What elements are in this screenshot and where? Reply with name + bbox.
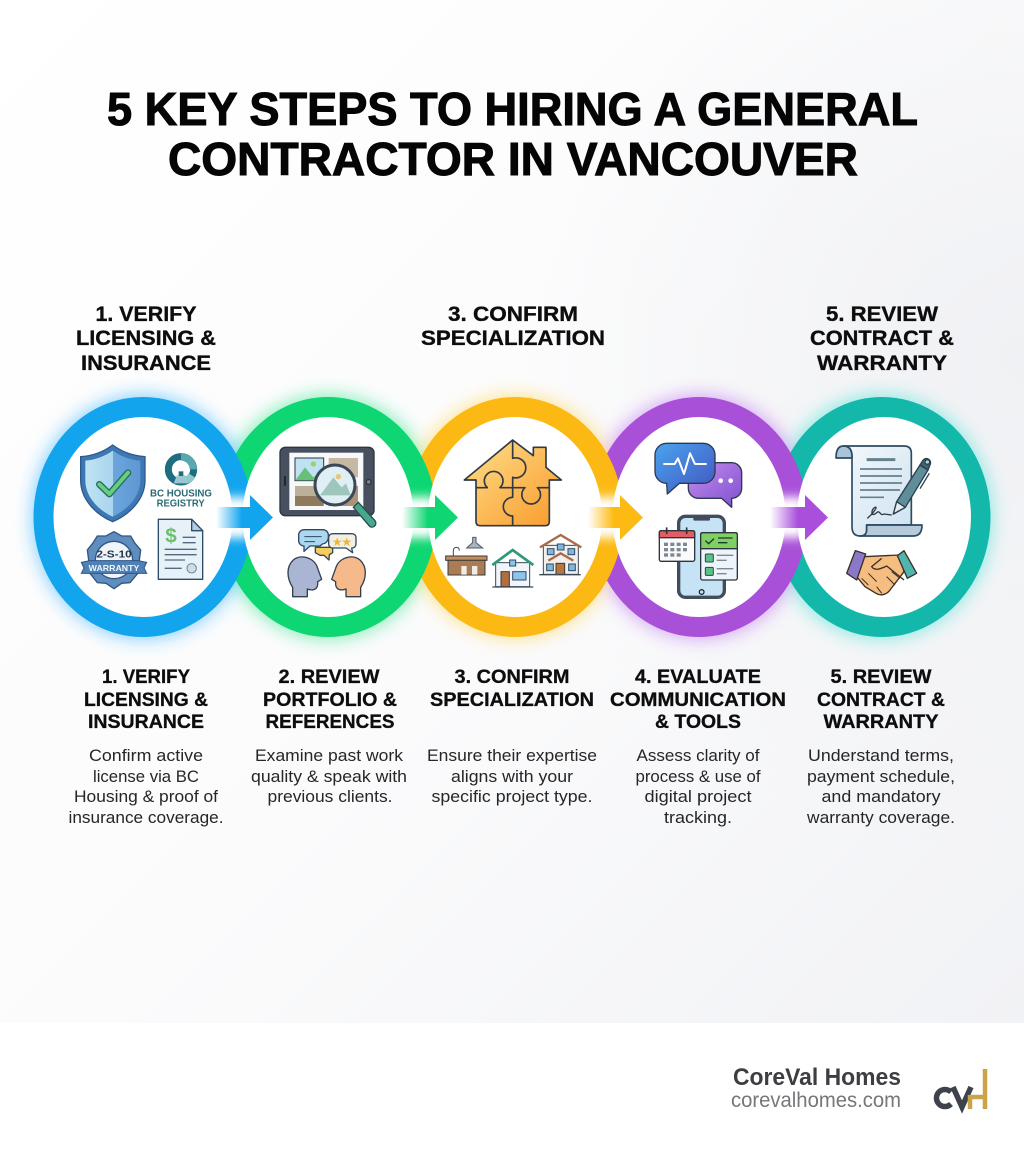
upper heading: step 5 <box>810 303 954 375</box>
description: step 2: previous clients. <box>268 787 392 806</box>
arrow: step 3 to 4 <box>588 495 643 540</box>
icon: BC Housing registry: BC HOUSING <box>150 489 212 500</box>
heading: step 1: INSURANCE <box>88 711 204 733</box>
description: step 5: payment schedule, <box>807 767 955 786</box>
description: step 1: Confirm active <box>89 746 203 765</box>
icons: step 5 contract and warranty <box>836 446 931 595</box>
upper heading: step 3: SPECIALIZATION <box>421 327 605 350</box>
icon: two-storey house <box>539 535 581 575</box>
icon: 2-5-10 warranty badge <box>81 532 147 589</box>
step 3 text <box>427 666 597 806</box>
icon: chat bubbles <box>655 443 742 507</box>
heading: step 1: 1. VERIFY <box>102 666 190 688</box>
icon: checklist card <box>701 533 737 580</box>
description: step 1 <box>68 746 224 827</box>
icon: insurance document <box>158 519 203 579</box>
icons: step 2 portfolio and references <box>280 447 376 597</box>
heading: step 3: 3. CONFIRM <box>454 666 570 688</box>
heading: step 1: LICENSING & <box>84 689 208 711</box>
heading: step 2: REFERENCES <box>266 711 394 733</box>
description: step 3: specific project type. <box>432 787 592 806</box>
icon: contract scroll <box>836 446 922 536</box>
heading: step 4: & TOOLS <box>655 711 741 733</box>
arrow: step 4 to 5 <box>770 495 828 540</box>
upper heading: step 5: 5. REVIEW <box>826 303 938 326</box>
upper heading: step 1: 1. VERIFY <box>96 303 196 326</box>
heading: step 4 <box>610 666 786 733</box>
heading: step 5: WARRANTY <box>824 711 938 733</box>
heading: step 2: 2. REVIEW <box>278 666 380 688</box>
icon: puzzle house <box>464 440 561 526</box>
footer brand <box>731 1064 901 1112</box>
icons: step 4 communication and tools <box>655 443 742 597</box>
ring chain <box>34 397 990 637</box>
description: step 5 <box>806 746 955 827</box>
icon: BC Housing registry <box>150 453 212 510</box>
step 1 text <box>68 666 224 827</box>
description: step 3: Ensure their expertise <box>427 746 597 765</box>
arrow: step 1 to 2 <box>216 495 273 540</box>
description: step 5: Understand terms, <box>808 746 954 765</box>
heading: step 4: 4. EVALUATE <box>635 666 761 688</box>
ring glows <box>44 407 980 627</box>
footer brand: CoreVal Homes <box>733 1064 901 1091</box>
junction halos <box>218 497 804 538</box>
description: step 2: quality & speak with <box>251 767 407 786</box>
heading: step 5: 5. REVIEW <box>830 666 932 688</box>
upper heading: step 3 <box>421 303 605 350</box>
icon: kitchen <box>446 537 487 575</box>
description: step 4: digital project <box>644 787 752 806</box>
heading: step 5: CONTRACT & <box>817 689 945 711</box>
ring interiors <box>54 417 971 617</box>
icon: pen <box>893 459 931 514</box>
title <box>107 83 918 185</box>
icon: insurance document: $ <box>165 525 177 548</box>
icon: shield with check <box>81 445 145 522</box>
heading: step 1 <box>84 666 208 733</box>
heading: step 2: PORTFOLIO & <box>263 689 397 711</box>
upper heading: step 5: CONTRACT & <box>810 327 954 350</box>
logo: CVH <box>936 1069 985 1109</box>
description: step 5: and mandatory <box>822 787 941 806</box>
title: CONTRACTOR IN VANCOUVER <box>168 133 858 185</box>
arrow: step 2 to 3 <box>402 495 458 540</box>
step 2 text <box>251 666 407 806</box>
heading: step 3: SPECIALIZATION <box>430 689 594 711</box>
description: step 3: aligns with your <box>451 767 573 786</box>
upper heading: step 1 <box>76 303 216 375</box>
description: step 1: insurance coverage. <box>68 808 224 827</box>
heading: step 4: COMMUNICATION <box>610 689 786 711</box>
upper heading: step 1: INSURANCE <box>81 352 211 375</box>
description: step 1: Housing & proof of <box>74 787 218 806</box>
description: step 4: process & use of <box>636 767 761 786</box>
icon: 2-5-10 warranty badge: WARRANTY <box>89 563 140 573</box>
description: step 2: Examine past work <box>255 746 404 765</box>
heading: step 3 <box>430 666 594 711</box>
icon: handshake <box>847 551 917 595</box>
icon: smartphone <box>679 516 724 597</box>
icon: two people talking <box>288 557 365 597</box>
icon: 2-5-10 warranty badge: 2-S-10 <box>96 550 132 561</box>
ring strokes <box>34 397 990 637</box>
upper heading: step 3: 3. CONFIRM <box>448 303 578 326</box>
footer brand: corevalhomes.com <box>731 1089 901 1112</box>
description: step 1: license via BC <box>93 767 199 786</box>
upper heading: step 1: LICENSING & <box>76 327 216 350</box>
icon: review speech bubbles <box>299 530 356 560</box>
description: step 4: tracking. <box>664 808 732 827</box>
description: step 2 <box>251 746 407 806</box>
description: step 4: Assess clarity of <box>636 746 760 765</box>
icons: step 1 licensing and insurance <box>81 445 212 589</box>
icon: review speech bubbles: ★★ <box>332 536 352 548</box>
icon: tablet with magnifier <box>280 447 376 527</box>
icon: calendar <box>659 527 695 561</box>
icon: small house <box>492 550 533 587</box>
step 4 text <box>610 666 786 827</box>
icon: BC Housing registry: REGISTRY <box>157 499 205 510</box>
description: step 5: warranty coverage. <box>806 808 955 827</box>
step 5 text <box>806 666 955 827</box>
upper heading: step 5: WARRANTY <box>817 352 947 375</box>
heading: step 2 <box>263 666 397 733</box>
heading: step 5 <box>817 666 945 733</box>
title: 5 KEY STEPS TO HIRING A GENERAL <box>107 83 918 135</box>
icons: step 3 specialization <box>446 440 581 587</box>
description: step 4 <box>636 746 761 827</box>
description: step 3 <box>427 746 597 806</box>
